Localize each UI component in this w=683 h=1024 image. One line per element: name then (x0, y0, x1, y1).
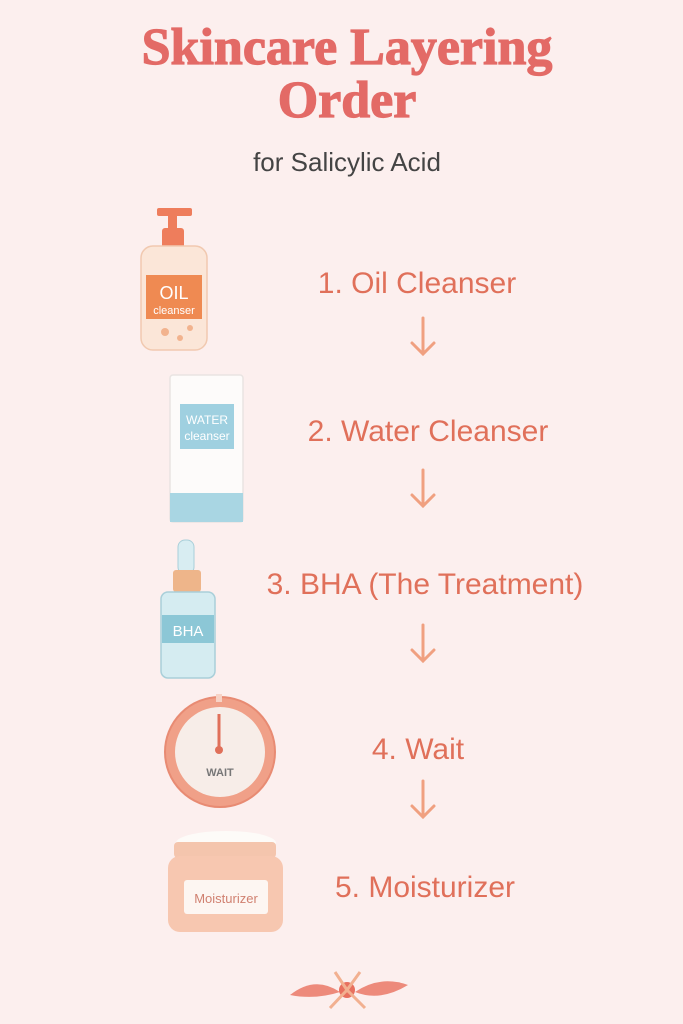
icon: moisturizer jar (168, 831, 283, 932)
icon: oil cleanser bottle (141, 208, 207, 350)
icon: BHA dropper: BHA (173, 623, 203, 640)
step 1 label: 1. Oil Cleanser (318, 267, 516, 300)
arrow 3 (412, 625, 434, 661)
icon: wait clock: WAIT (206, 767, 234, 779)
title (142, 19, 552, 129)
icon: oil cleanser bottle: OIL (159, 283, 189, 303)
step 3 label: 3. BHA (The Treatment) (267, 568, 583, 601)
arrow 4 (412, 781, 434, 817)
step 5 label: 5. Moisturizer (335, 871, 515, 904)
step 4 label: 4. Wait (372, 733, 465, 766)
icon: water cleanser tube (170, 375, 243, 522)
title: Order (278, 72, 416, 129)
icon: oil cleanser bottle: cleanser (153, 305, 195, 317)
icon: water cleanser tube: cleanser (184, 429, 230, 443)
arrow 1 (412, 318, 434, 354)
icon: water cleanser tube: WATER (186, 413, 228, 427)
subtitle: for Salicylic Acid (253, 147, 441, 177)
arrow 2 (412, 470, 434, 506)
decorative flourish (290, 972, 408, 1008)
icon: BHA dropper (161, 540, 215, 678)
title: Skincare Layering (142, 19, 552, 76)
icon: moisturizer jar: Moisturizer (194, 891, 258, 906)
step 2 label: 2. Water Cleanser (308, 415, 548, 448)
icon: wait clock (165, 694, 275, 807)
